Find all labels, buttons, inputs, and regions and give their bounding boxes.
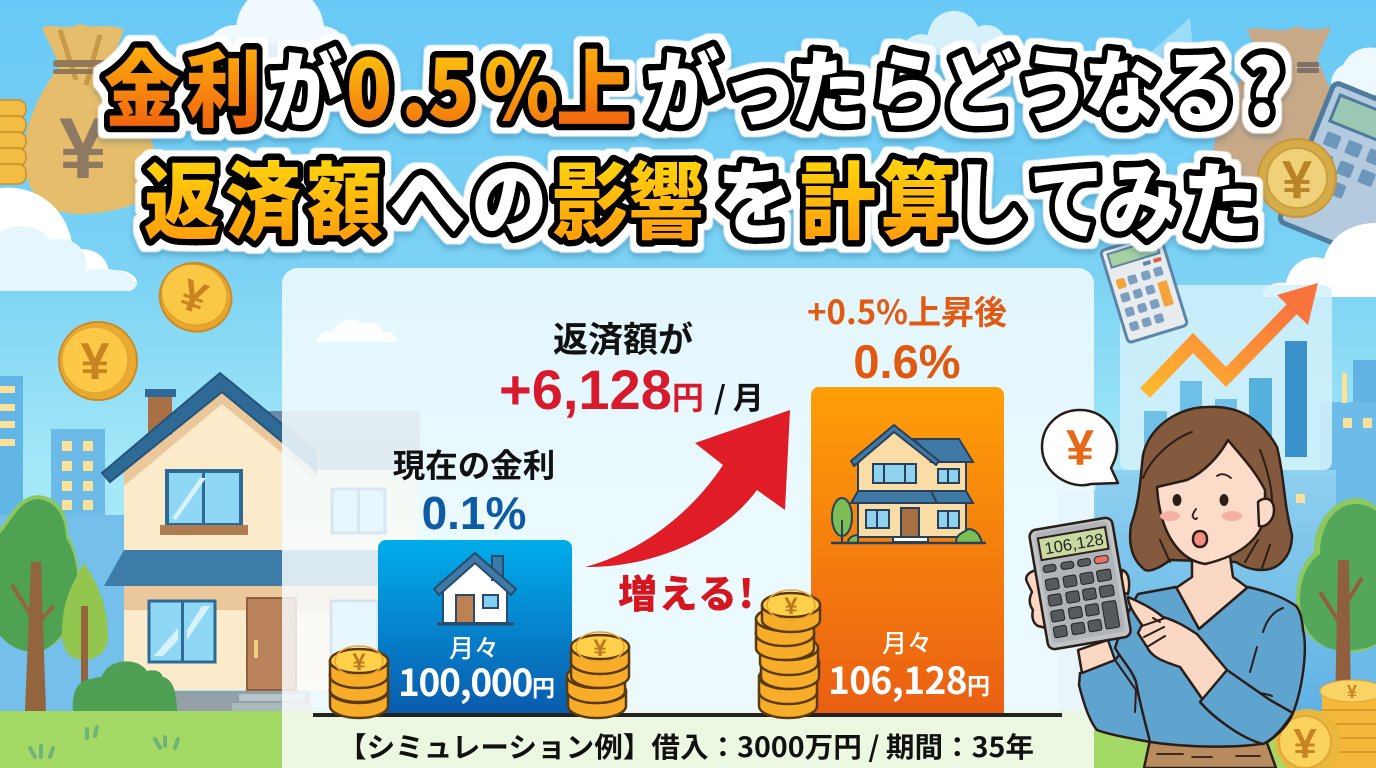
icon: calculator showing 106,128 <box>1028 517 1132 650</box>
label: after rise <box>807 286 1007 388</box>
icon: calculator right <box>1279 82 1376 266</box>
cheeks <box>1160 511 1242 521</box>
tree right <box>1296 498 1376 711</box>
cloud right lower <box>1262 223 1376 297</box>
callout: repayment difference: 返済額が <box>553 312 693 363</box>
label: current rate <box>393 440 555 539</box>
title line 1: 金利が0.5%上がったらどうなる? <box>104 23 1283 145</box>
faint cloud in panel <box>317 319 397 342</box>
panel: simulation <box>282 268 1094 768</box>
icon: coin right: ¥ <box>1282 150 1312 210</box>
ear <box>1258 499 1274 526</box>
holding hand <box>1026 570 1129 673</box>
label: current rate: 現在の金利 <box>393 440 555 487</box>
cloud top left <box>205 0 365 85</box>
label: increase: 増える! <box>618 564 754 620</box>
baseline <box>313 713 1062 717</box>
torso sweater <box>1115 587 1305 747</box>
coin stack left <box>330 646 388 718</box>
label: monthly: 月々 <box>882 624 932 660</box>
hair back <box>1130 407 1292 571</box>
left sleeve <box>1079 630 1170 742</box>
icon: coin lower <box>59 322 137 400</box>
faint triangle <box>1130 18 1195 70</box>
speech bubble: yen <box>1042 410 1118 485</box>
coin stack right <box>756 590 820 718</box>
buildings right <box>1058 360 1376 711</box>
mouth and nose <box>1193 531 1207 547</box>
display reading: 106,128 <box>1043 531 1105 558</box>
icon: money bag left: ¥ <box>59 101 107 197</box>
grass <box>0 711 1376 768</box>
bush <box>73 661 177 711</box>
icon: small calculator <box>1100 233 1188 343</box>
finger lines <box>1142 618 1165 647</box>
right sleeve <box>1200 670 1293 744</box>
title <box>104 23 1283 257</box>
hair strands <box>1143 432 1272 568</box>
trees left <box>0 495 108 711</box>
speech bubble: yen: ¥ <box>1066 420 1094 476</box>
label: monthly: 月々 <box>449 629 499 665</box>
sweater folds <box>1115 608 1283 712</box>
value: 0.6%: 0.6% <box>853 335 961 388</box>
icon: money bag right <box>1211 26 1331 190</box>
icon: coin upper: ¥ <box>174 270 214 324</box>
coin stack center <box>567 632 629 718</box>
arrow: increase <box>585 410 790 567</box>
bar: after rise <box>811 387 1004 713</box>
caption: simulation terms: 【シミュレーション例】借入：3000万円 / 期間：35年 <box>338 726 1034 766</box>
value: +6,128 yen per month: +6,128円 / 月 <box>499 358 764 421</box>
bar: current rate <box>378 540 572 713</box>
icon: small house <box>434 553 516 624</box>
coins bottom right <box>1275 680 1376 768</box>
face <box>1157 440 1265 564</box>
title line 2: 返済額への影響を計算してみた <box>144 135 1258 257</box>
icon: coin lower: ¥ <box>81 333 110 391</box>
amount: 100,000 yen: 100,000円 <box>398 653 555 707</box>
amount: 106,128 yen: 106,128円 <box>828 651 990 705</box>
coin stack left: ¥ <box>352 649 366 676</box>
value: 0.1%: 0.1% <box>422 487 526 539</box>
cloud upper right <box>1331 47 1376 95</box>
cloud lower left <box>0 188 137 291</box>
coin stack right: ¥ <box>784 593 798 620</box>
neck <box>1176 556 1248 629</box>
callout: repayment difference <box>499 312 764 421</box>
pointing hand <box>1128 597 1227 700</box>
icon: coin right <box>1258 139 1336 217</box>
coin stack center: ¥ <box>593 635 607 662</box>
label: after rise: +0.5%上昇後 <box>807 286 1007 334</box>
icon: money bag left <box>24 24 160 214</box>
icon: coin stack left edge <box>0 100 26 184</box>
cloud top center right <box>900 11 1007 55</box>
house background <box>102 373 420 711</box>
coins bottom right: ¥ <box>1347 682 1357 702</box>
chart panel with rising arrow <box>1120 283 1332 470</box>
skirt <box>1144 740 1276 768</box>
woman with calculator <box>1026 407 1305 768</box>
coins bottom right: ¥ <box>1293 720 1317 767</box>
eyes <box>1172 494 1228 506</box>
buildings left <box>0 376 124 711</box>
icon: coin upper <box>150 253 241 342</box>
icon: two-storey house <box>831 425 986 543</box>
